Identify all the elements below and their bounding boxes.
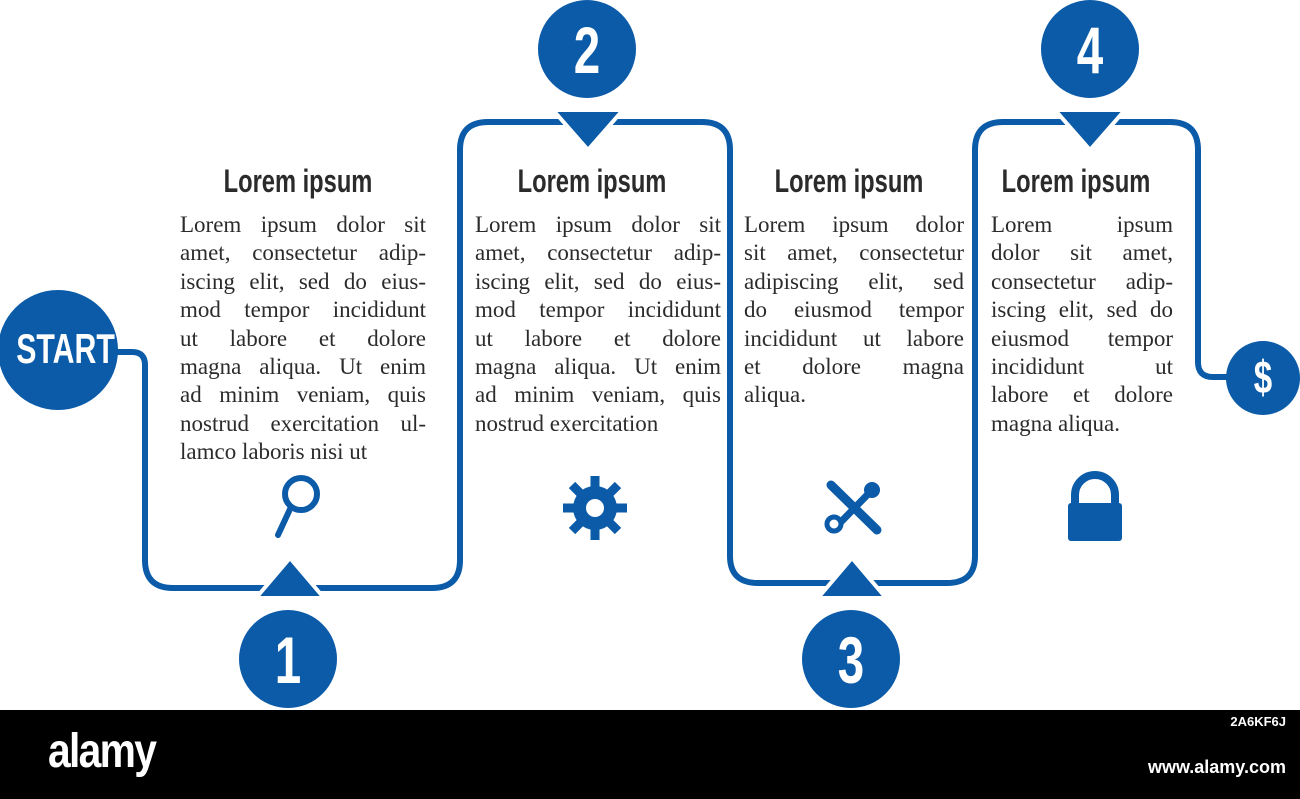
text 4: incididunt ut bbox=[991, 354, 1173, 379]
text 2 bbox=[475, 212, 721, 436]
text 1: lamco laboris nisi ut bbox=[180, 439, 367, 464]
text 4: eiusmod tempor bbox=[991, 326, 1173, 351]
icon: tools bbox=[827, 482, 880, 531]
text 3: sit amet, consectetur bbox=[744, 240, 964, 265]
text 4: Lorem ipsum bbox=[991, 212, 1173, 237]
heading 2: Lorem ipsum bbox=[518, 163, 666, 199]
icon: magnifier bbox=[278, 478, 317, 535]
text 1 bbox=[180, 212, 426, 464]
triangle markers bbox=[256, 110, 1125, 598]
number 1: 1 bbox=[275, 623, 301, 697]
text 4: iscing elit, sed do bbox=[991, 297, 1173, 322]
text 3: incididunt ut labore bbox=[744, 326, 964, 351]
text 2: Lorem ipsum dolor sit bbox=[475, 212, 721, 237]
text 4: dolor sit amet, bbox=[991, 240, 1173, 265]
text 3: et dolore magna bbox=[744, 354, 964, 379]
footer bar bbox=[0, 710, 1300, 799]
icon: gear bbox=[563, 476, 627, 540]
text 1: amet, consectetur adip- bbox=[180, 240, 426, 265]
text 2: ut labore et dolore bbox=[475, 326, 721, 351]
number 4: 4 bbox=[1077, 13, 1103, 87]
text 1: magna aliqua. Ut enim bbox=[180, 354, 426, 379]
text 2: nostrud exercitation bbox=[475, 411, 658, 436]
text 1: nostrud exercitation ul- bbox=[180, 411, 426, 436]
text 1: Lorem ipsum dolor sit bbox=[180, 212, 426, 237]
text 3: adipiscing elit, sed bbox=[744, 269, 964, 294]
text 3: do eiusmod tempor bbox=[744, 297, 964, 322]
heading 1: Lorem ipsum bbox=[224, 163, 372, 199]
start label: START bbox=[16, 325, 115, 372]
text 2: ad minim veniam, quis bbox=[475, 382, 721, 407]
text 3: Lorem ipsum dolor bbox=[744, 212, 964, 237]
logo: alamy bbox=[48, 725, 155, 778]
text 1: ad minim veniam, quis bbox=[180, 382, 426, 407]
text 2: mod tempor incididunt bbox=[475, 297, 721, 322]
text 2: amet, consectetur adip- bbox=[475, 240, 721, 265]
text 3 bbox=[744, 212, 964, 407]
text 4 bbox=[991, 212, 1173, 436]
heading 3: Lorem ipsum bbox=[775, 163, 923, 199]
image id: 2A6KF6J bbox=[1230, 714, 1286, 729]
text 2: magna aliqua. Ut enim bbox=[475, 354, 721, 379]
text 1: ut labore et dolore bbox=[180, 326, 426, 351]
number 2: 2 bbox=[574, 13, 600, 87]
text 3: aliqua. bbox=[744, 382, 806, 407]
text 2: iscing elit, sed do eius- bbox=[475, 269, 721, 294]
text 4: labore et dolore bbox=[991, 382, 1173, 407]
url: www.alamy.com bbox=[1148, 757, 1286, 777]
icon: dollar: $ bbox=[1254, 351, 1272, 403]
text 1: mod tempor incididunt bbox=[180, 297, 426, 322]
icon: lock bbox=[1068, 475, 1122, 541]
heading 4: Lorem ipsum bbox=[1002, 163, 1150, 199]
number 3: 3 bbox=[838, 623, 864, 697]
text 1: iscing elit, sed do eius- bbox=[180, 269, 426, 294]
text 4: consectetur adip- bbox=[991, 269, 1173, 294]
text 4: magna aliqua. bbox=[991, 411, 1120, 436]
